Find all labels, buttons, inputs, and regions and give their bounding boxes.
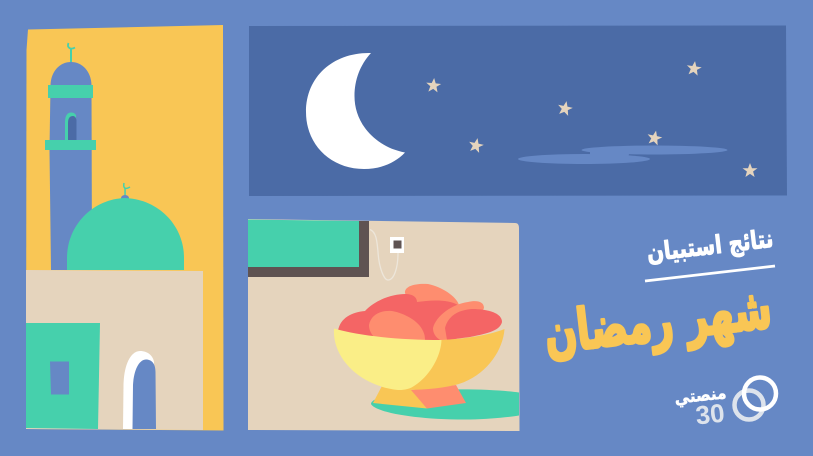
star 3 (467, 137, 485, 153)
star 6 (742, 163, 758, 177)
crescent moon (306, 53, 405, 169)
dates (338, 284, 502, 342)
star 4 (686, 60, 702, 76)
panel: night sky (249, 26, 787, 196)
annex window (50, 362, 69, 394)
minaret upper band (48, 85, 93, 98)
star 2 (556, 100, 574, 116)
minaret balcony (45, 140, 96, 150)
dome crescent (124, 183, 130, 188)
sky background (249, 26, 787, 196)
logo: Minasati 30 (674, 378, 776, 430)
logo light ring (734, 390, 764, 420)
panel: mosque (26, 25, 224, 430)
window green pane (248, 220, 359, 267)
logo word: منصتي (674, 383, 727, 409)
dome body (67, 198, 184, 270)
panel: room with dates (248, 219, 520, 431)
window dark opening (68, 116, 76, 140)
logo number: 30 (694, 398, 726, 430)
power cord (370, 230, 398, 280)
heading underline (645, 266, 775, 281)
foot left (373, 384, 427, 408)
room wall (248, 219, 520, 431)
dome cap (121, 195, 129, 201)
star 1 (425, 77, 442, 93)
main red dates (338, 294, 461, 342)
socket centre (394, 240, 402, 248)
window frame (248, 221, 369, 277)
minaret (45, 43, 96, 270)
dome pole (124, 188, 126, 197)
clouds (518, 146, 728, 164)
upper cloud (582, 146, 728, 154)
door blue opening (132, 360, 156, 429)
back date (405, 284, 459, 320)
door (123, 351, 156, 429)
wall socket (390, 237, 404, 253)
socket plate (390, 237, 404, 253)
right back date (433, 301, 484, 342)
cloud join (590, 150, 630, 158)
minaret window (65, 112, 76, 140)
building wall (26, 270, 203, 430)
foot right (411, 385, 466, 408)
plate (371, 389, 519, 420)
bowl foot (373, 384, 466, 408)
bowl yellow side (334, 328, 442, 390)
door white arch (123, 351, 156, 429)
minaret body (50, 62, 92, 270)
minaret crescent (68, 43, 75, 49)
mosque yellow background (26, 25, 224, 430)
logo white ring (744, 378, 776, 410)
bowl (334, 328, 504, 390)
window green arch (65, 112, 76, 140)
lower cloud (518, 154, 650, 164)
minaret pole (70, 49, 72, 63)
dome (67, 183, 184, 270)
stars (425, 60, 758, 177)
heading: survey results: نتائج استبيان (645, 224, 775, 268)
star 5 (646, 129, 663, 146)
bowl orange side (400, 329, 504, 390)
right red date (445, 309, 502, 340)
green annex (26, 323, 100, 429)
left salmon date (369, 311, 425, 342)
